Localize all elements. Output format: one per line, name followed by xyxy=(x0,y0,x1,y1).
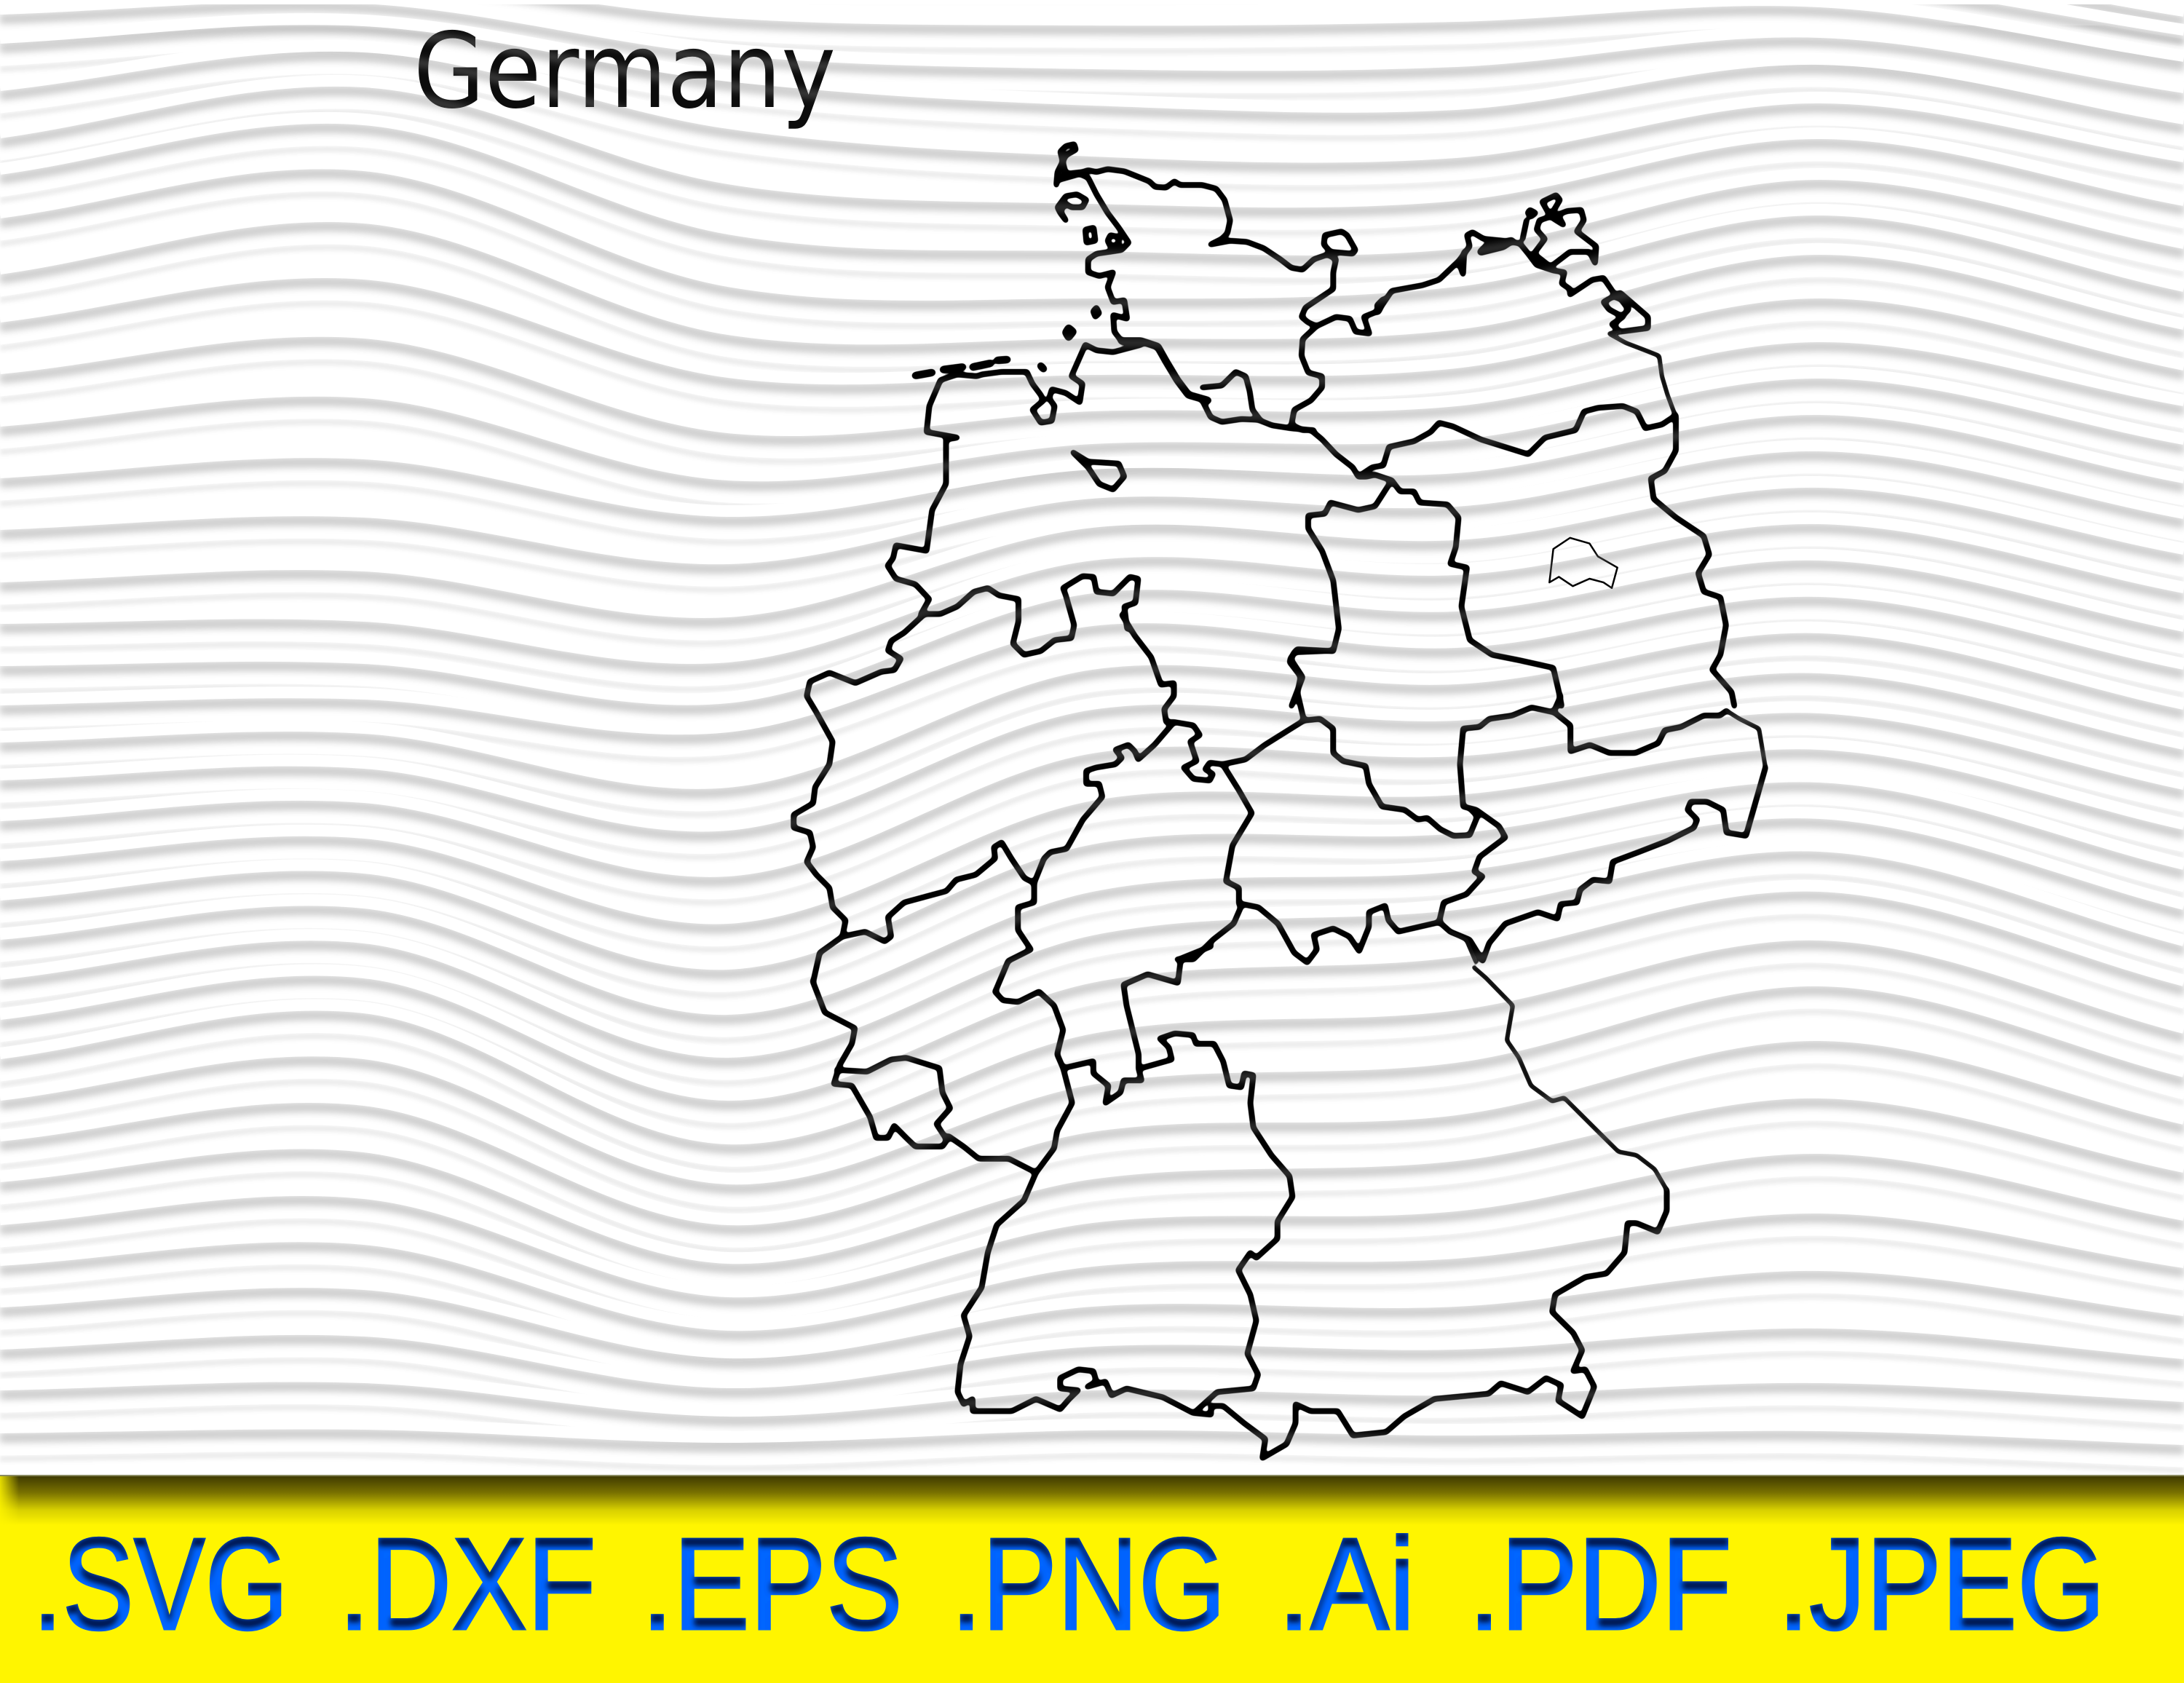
label: EPS: .EPS xyxy=(641,1511,903,1658)
map of Germany with state borders xyxy=(794,144,1765,1458)
title: Germany xyxy=(414,10,836,132)
label: JPEG: .JPEG xyxy=(1778,1511,2105,1658)
southern states xyxy=(812,946,1667,1458)
Berlin outline xyxy=(1549,538,1618,588)
central states xyxy=(794,615,1765,991)
label: Ai: .Ai xyxy=(1278,1511,1415,1658)
label: DXF: .DXF xyxy=(339,1511,596,1658)
label: PDF: .PDF xyxy=(1468,1511,1732,1658)
file format labels xyxy=(33,1511,2105,1658)
yellow footer band xyxy=(0,1475,2184,1683)
northern states xyxy=(887,144,1734,706)
label: PNG: .PNG xyxy=(951,1511,1226,1658)
label: SVG: .SVG xyxy=(33,1511,288,1658)
